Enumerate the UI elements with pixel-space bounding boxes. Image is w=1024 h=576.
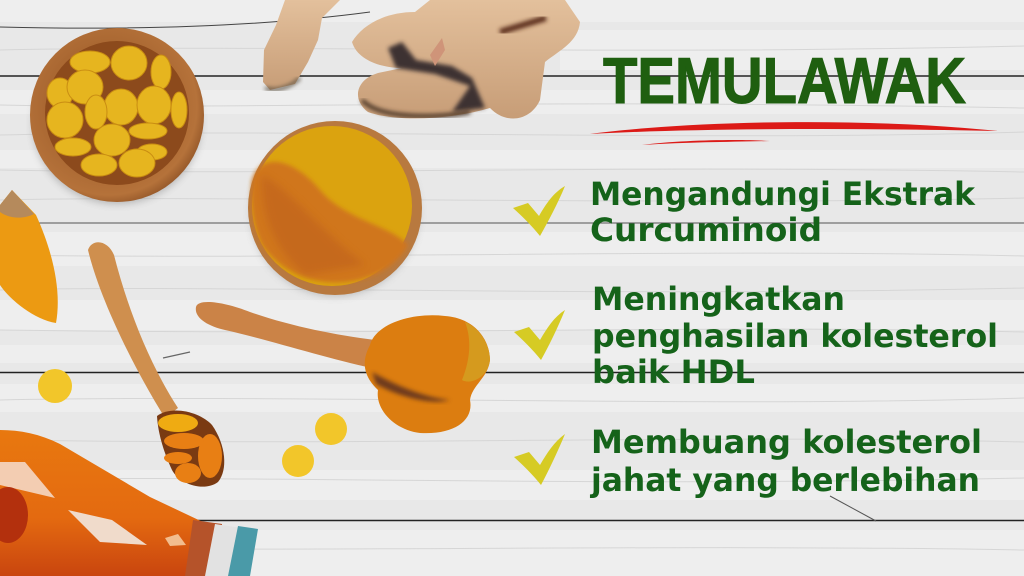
benefit 3: jahat yang berlebihan — [589, 461, 980, 499]
title: TEMULAWAK — [603, 44, 966, 117]
title — [590, 44, 998, 145]
turmeric tablets — [38, 369, 347, 477]
red brush underline — [590, 122, 998, 145]
benefit 2 — [514, 280, 998, 391]
bowl of turmeric slices — [30, 28, 204, 204]
bowl of turmeric powder — [248, 121, 422, 296]
wooden spoon with turmeric powder — [196, 302, 490, 433]
icon: check mark — [513, 186, 565, 236]
benefit 1 — [513, 175, 976, 249]
benefit 3 — [514, 423, 982, 499]
benefit 2: penghasilan kolesterol — [592, 317, 998, 355]
icon: check mark — [514, 434, 565, 485]
benefit 2: Meningkatkan — [592, 280, 845, 318]
cut turmeric root left — [0, 190, 58, 323]
icon: check mark — [514, 310, 565, 360]
wooden spoon with turmeric pieces — [88, 242, 224, 487]
benefit 3: Membuang kolesterol — [591, 423, 982, 461]
bottle of turmeric drink — [0, 430, 258, 576]
turmeric roots top — [263, 0, 580, 118]
benefit 2: baik HDL — [592, 353, 755, 391]
benefit 1: Curcuminoid — [590, 211, 822, 249]
benefit 1: Mengandungi Ekstrak — [590, 175, 976, 213]
